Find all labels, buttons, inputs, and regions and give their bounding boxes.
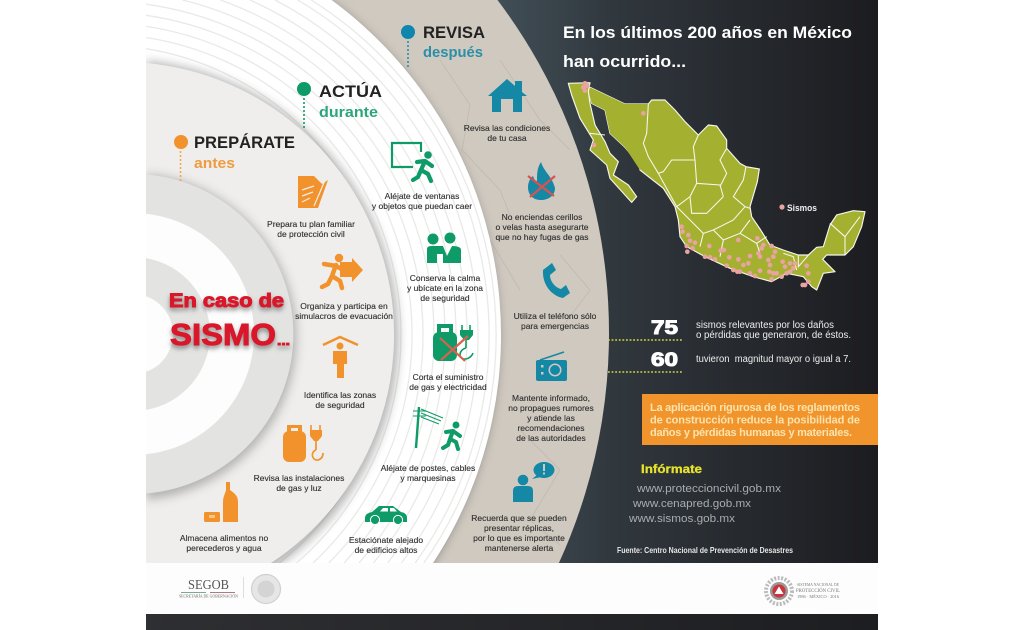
panel: preparate grey band bbox=[146, 61, 398, 613]
stat: 75 sismos relevantes: sismos relevantes por los daños bbox=[696, 320, 834, 331]
heading: ultimos 200 anos bbox=[563, 23, 852, 71]
text: informado: recomendaciones bbox=[517, 423, 585, 433]
panel: revisa beige band bbox=[332, 0, 609, 563]
text: informado: de las autoridades bbox=[516, 433, 586, 443]
text: instalaciones: de gas y luz bbox=[276, 483, 322, 493]
text: ventanas bbox=[372, 191, 472, 211]
logo: SEGOB: SEGOB bbox=[188, 578, 229, 593]
logo: proteccion civil: SISTEMA NACIONAL DE bbox=[797, 583, 840, 587]
logo: SEGOB: SECRETARÍA DE GOBERNACIÓN bbox=[179, 594, 238, 598]
text: simulacros: Organiza y participa en bbox=[300, 301, 388, 311]
text: ventanas: y objetos que puedan caer bbox=[372, 201, 472, 211]
text: replicas bbox=[471, 513, 567, 553]
heading: en caso de sismo: En caso de bbox=[169, 291, 284, 312]
footer: white strip bbox=[146, 563, 878, 614]
heading: en caso de sismo: SISMO bbox=[170, 317, 276, 352]
text: plan familiar: de protección civil bbox=[277, 229, 345, 239]
callout: reglamentos de construccion: de construcción reduce la posibilidad de bbox=[650, 414, 860, 426]
source note: Fuente: Centro Nacional de Prevención de Desastres bbox=[617, 545, 793, 555]
text: alimentos bbox=[180, 533, 268, 553]
text: condiciones bbox=[464, 123, 550, 143]
text: informado bbox=[508, 393, 594, 443]
text: zonas de seguridad: de seguridad bbox=[315, 400, 365, 410]
text: calma bbox=[407, 273, 483, 303]
icon: person with speech bubble bbox=[513, 462, 554, 502]
text: replicas: por lo que es importante bbox=[473, 533, 565, 543]
links: informate: www.cenapred.gob.mx bbox=[632, 498, 752, 510]
callout: reglamentos de construccion: La aplicación rigurosa de los reglamentos bbox=[650, 402, 860, 414]
map: Mexico earthquakes bbox=[568, 81, 865, 290]
text: estacionate bbox=[349, 535, 423, 555]
heading: en caso de sismo bbox=[169, 291, 290, 352]
panel: dark background bbox=[146, 0, 878, 563]
text: plan familiar: Prepara tu plan familiar bbox=[267, 219, 355, 229]
icon: radio bbox=[536, 352, 567, 381]
text: replicas: Recuerda que se pueden bbox=[471, 513, 567, 523]
text: instalaciones bbox=[254, 473, 344, 493]
heading: actua durante bbox=[297, 82, 382, 130]
text: alimentos: Almacena alimentos no bbox=[180, 533, 268, 543]
text: condiciones: Revisa las condiciones bbox=[464, 123, 550, 133]
text: suministro bbox=[409, 372, 487, 392]
text: plan familiar bbox=[267, 219, 355, 239]
links: informate: www.proteccioncivil.gob.mx bbox=[636, 483, 782, 495]
logo: proteccion civil: 1986 · MÉXICO · 2016 bbox=[797, 594, 839, 599]
text: estacionate: de edificios altos bbox=[355, 545, 417, 555]
text: cerillos: que no hay fugas de gas bbox=[495, 232, 589, 242]
text: suministro: de gas y electricidad bbox=[409, 382, 487, 392]
icon: car bbox=[365, 506, 407, 525]
text: condiciones: de tu casa bbox=[487, 133, 527, 143]
heading: en caso de sismo: ... bbox=[277, 333, 290, 348]
text: telefono: Utiliza el teléfono sólo bbox=[514, 311, 597, 321]
text: instalaciones: Revisa las instalaciones bbox=[254, 473, 344, 483]
text: simulacros bbox=[295, 301, 393, 321]
stat: 60 magnitud: 60 bbox=[651, 350, 678, 371]
footer: dark bar bbox=[146, 614, 878, 630]
text: calma: Conserva la calma bbox=[410, 273, 480, 283]
callout: reglamentos de construccion bbox=[642, 394, 878, 445]
text: ventanas: Aléjate de ventanas bbox=[385, 191, 459, 201]
logo: SEGOB bbox=[179, 574, 280, 604]
stat: 75 sismos relevantes: 75 bbox=[651, 318, 679, 339]
text: informado: no propagues rumores bbox=[508, 403, 594, 413]
text: postes: Aléjate de postes, cables bbox=[381, 463, 475, 473]
stat: 60 magnitud: tuvieron magnitud mayor o igual a 7. bbox=[696, 354, 851, 365]
heading: preparate antes: antes bbox=[194, 155, 235, 172]
icon: two people bbox=[427, 232, 461, 263]
text: cerillos bbox=[495, 212, 589, 242]
text: calma: de seguridad bbox=[420, 293, 470, 303]
heading: revisa despues bbox=[401, 23, 485, 69]
text: replicas: mantenerse alerta bbox=[485, 543, 554, 553]
text: zonas de seguridad bbox=[304, 390, 376, 410]
icon: safe zone person bbox=[323, 337, 358, 378]
links: informate: Infórmate bbox=[641, 462, 702, 476]
stat: 60 magnitud bbox=[608, 350, 851, 372]
text: suministro: Corta el suministro bbox=[413, 372, 484, 382]
text: calma: y ubícate en la zona bbox=[407, 283, 483, 293]
icon: cut gas and electricity bbox=[433, 324, 473, 361]
panel: central target disc bbox=[146, 174, 296, 500]
icon: house bbox=[488, 79, 527, 112]
links: informate: www.sismos.gob.mx bbox=[628, 513, 736, 525]
icon: utility post and runner bbox=[413, 407, 460, 449]
text: postes: y marquesinas bbox=[400, 473, 456, 483]
text: alimentos: perecederos y agua bbox=[186, 543, 262, 553]
heading: ultimos 200 anos: En los últimos 200 años en México bbox=[563, 23, 852, 42]
text: simulacros: simulacros de evacuación bbox=[295, 311, 393, 321]
text: informado: Mantente informado, bbox=[512, 393, 590, 403]
text: cerillos: o velas hasta asegurarte bbox=[495, 222, 589, 232]
heading: actua durante: ACTÚA bbox=[319, 82, 382, 101]
text: telefono bbox=[514, 311, 597, 331]
text: replicas: presentar réplicas, bbox=[484, 523, 554, 533]
callout: reglamentos de construccion: daños y pérdidas humanas y materiales. bbox=[650, 427, 852, 439]
heading: preparate antes: PREPÁRATE bbox=[194, 133, 295, 152]
stat: 75 sismos relevantes bbox=[608, 318, 851, 341]
text: zonas de seguridad: Identifica las zonas bbox=[304, 390, 376, 400]
text: cerillos: No enciendas cerillos bbox=[502, 212, 582, 222]
links: informate bbox=[628, 462, 782, 525]
text: telefono: para emergencias bbox=[521, 321, 589, 331]
icon: plan document bbox=[298, 176, 328, 208]
heading: revisa despues: después bbox=[423, 44, 483, 61]
legend: sismos: Sismos bbox=[787, 203, 817, 214]
icon: flame crossed bbox=[528, 162, 555, 200]
heading: ultimos 200 anos: han ocurrido... bbox=[563, 52, 686, 71]
icon: window and runner bbox=[392, 143, 432, 181]
heading: preparate antes bbox=[174, 133, 295, 181]
icon: telephone bbox=[543, 263, 570, 298]
icon: evacuation runner with arrow bbox=[322, 254, 363, 288]
logo: proteccion civil: PROTECCIÓN CIVIL bbox=[796, 586, 841, 594]
logo: proteccion civil bbox=[766, 578, 841, 604]
icon: gas tank and plug bbox=[283, 425, 323, 462]
icon: food and water bbox=[204, 482, 238, 522]
heading: actua durante: durante bbox=[319, 104, 378, 121]
text: informado: y atiende las bbox=[527, 413, 575, 423]
stat: 75 sismos relevantes: o pérdidas que generaron, de éstos. bbox=[696, 330, 851, 341]
text: estacionate: Estaciónate alejado bbox=[349, 535, 423, 545]
text: postes bbox=[381, 463, 475, 483]
panel: actua white band bbox=[146, 0, 501, 620]
heading: revisa despues: REVISA bbox=[423, 23, 485, 42]
